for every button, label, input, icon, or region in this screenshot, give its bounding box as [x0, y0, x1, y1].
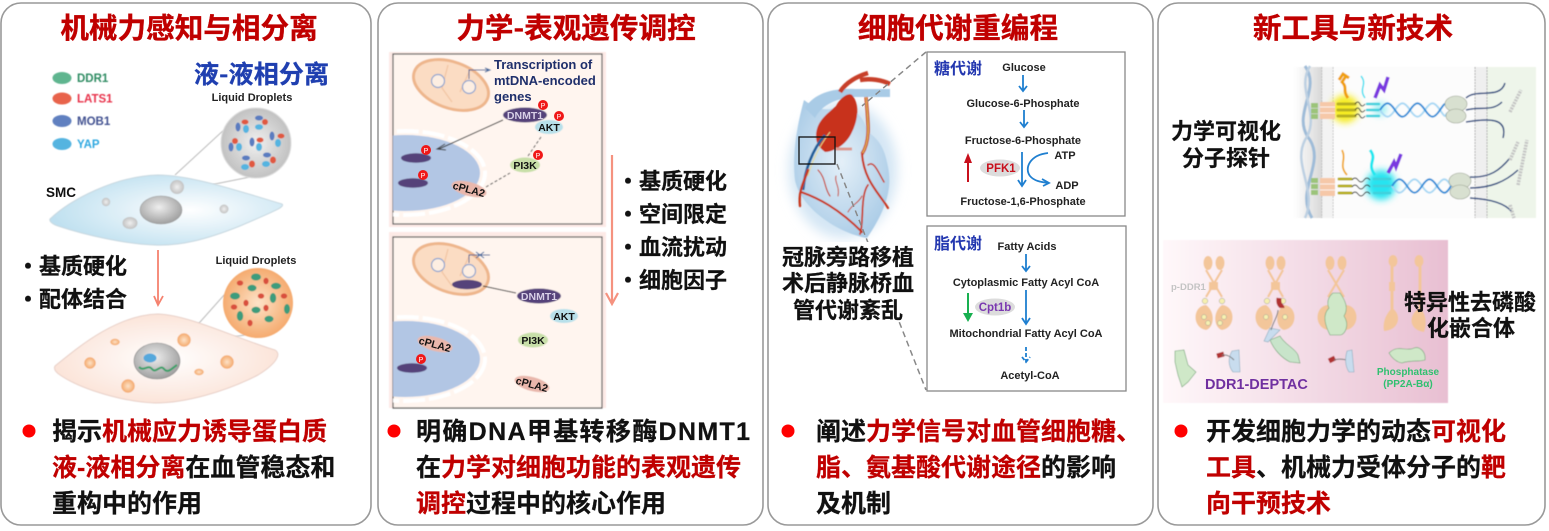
illustration: heart — [789, 73, 897, 238]
conclusion text panel 4: 工具、机械力受体分子的靶 — [1206, 454, 1506, 482]
panel: metabolic reprogramming — [768, 3, 1153, 525]
label: transcription: genes — [494, 89, 532, 104]
label: phosphatase: (PP2A-Bα) — [1383, 379, 1433, 390]
arrow: stimulus down — [606, 155, 618, 304]
box: lipid metabolism: Cytoplasmic Fatty Acyl CoA — [953, 277, 1099, 289]
conclusion text panel 2: 在力学对细胞功能的表观遗传 — [416, 454, 741, 482]
labels: signalling proteins active — [451, 110, 560, 200]
bullets: stimuli: • — [617, 263, 639, 295]
phospho markers active: P — [424, 148, 429, 155]
conclusion text panel 3: 阐述力学信号对血管细胞糖、 — [816, 418, 1141, 446]
title: panel 1: 机械力感知与相分离 — [60, 6, 318, 47]
bullets: stimuli: 基质硬化 — [639, 164, 727, 196]
label: liquid droplets upper: Liquid Droplets — [212, 92, 292, 104]
box: glucose metabolism: 糖代谢 — [934, 55, 982, 79]
conclusion text panel 1: 揭示机械应力诱导蛋白质 — [52, 417, 327, 446]
labels: signalling proteins inhibited: DNMT1 — [521, 291, 557, 303]
label: SMC: SMC — [46, 185, 76, 200]
illustration: tension probe — [1294, 66, 1536, 218]
conclusion text panel 2: 明确DNA甲基转移酶DNMT1 — [416, 418, 750, 446]
box: glucose metabolism — [927, 52, 1125, 216]
title: panel 3: 细胞代谢重编程 — [858, 6, 1058, 47]
label: transcription: Transcription of — [494, 57, 593, 72]
bullets: stimulus list: • — [17, 282, 39, 314]
box: glucose metabolism: Glucose-6-Phosphate — [966, 98, 1080, 110]
box: lipid metabolism — [927, 226, 1126, 391]
label: vein graft caption — [780, 240, 922, 325]
phospho markers active: P — [557, 114, 562, 121]
legend: proteins: LATS1 — [77, 94, 113, 106]
bullets: stimulus list: 配体结合 — [39, 282, 127, 314]
bullets: stimuli: 血流扰动 — [639, 230, 727, 262]
conclusion text panel 4: 开发细胞力学的动态可视化 — [1206, 418, 1506, 446]
illustration: DDR1-DEPTAC panel — [1163, 240, 1448, 403]
box: lipid metabolism: Mitochondrial Fatty Acyl CoA — [950, 328, 1103, 340]
bullets: stimulus list — [17, 249, 127, 314]
box: glucose metabolism: Fructose-1,6-Phosphate — [960, 196, 1086, 208]
arrow: transition down — [154, 250, 163, 305]
label: phosphatase — [1377, 367, 1440, 390]
labels: signalling proteins active: cPLA2 — [451, 180, 486, 200]
label: force probe: 分子探针 — [1182, 141, 1270, 173]
label: liquid droplets lower: Liquid Droplets — [216, 255, 296, 267]
box: glucose metabolism: ADP — [1055, 180, 1079, 192]
label: DDR1-DEPTAC: DDR1-DEPTAC — [1205, 377, 1308, 393]
bullets: stimulus list: 基质硬化 — [39, 249, 127, 281]
panel: new tools and technology — [1158, 3, 1545, 525]
labels: signalling proteins inhibited: cPLA2 — [514, 375, 549, 395]
label: transcription — [494, 57, 596, 104]
conclusion text panel 1: 液-液相分离在血管稳态和 — [52, 454, 335, 482]
bullets: stimuli — [617, 164, 727, 295]
label: transcription: mtDNA-encoded — [494, 73, 596, 88]
droplet zoom grey — [175, 108, 291, 191]
box: lipid metabolism: Fatty Acids — [998, 241, 1056, 253]
box: lipid metabolism: Acetyl-CoA — [1000, 370, 1060, 382]
conclusion text panel 4 — [1174, 418, 1506, 518]
bullets: stimuli: • — [617, 164, 639, 196]
box: glucose metabolism: Glucose — [1002, 62, 1046, 74]
conclusion text panel 2 — [388, 418, 750, 518]
conclusion text panel 1: 重构中的作用 — [52, 490, 202, 518]
title: panel 4: 新工具与新技术 — [1253, 6, 1453, 47]
bullets: stimulus list: • — [17, 249, 39, 281]
label: vein graft caption: 术后静脉桥血 — [782, 266, 914, 298]
dashed zoom lines — [837, 52, 926, 390]
labels: signalling proteins active: DNMT1 — [507, 110, 543, 122]
box: glucose metabolism: ATP — [1054, 150, 1076, 162]
box: glucose metabolism: Fructose-6-Phosphate — [965, 135, 1081, 147]
legend: proteins: DDR1 — [77, 73, 109, 85]
labels: signalling proteins inhibited — [416, 291, 575, 395]
label: specific dephosphorylation chimera: 化嵌合体 — [1427, 311, 1515, 343]
label: specific dephosphorylation chimera — [1404, 285, 1536, 343]
box: glucose metabolism: PFK1 — [986, 163, 1016, 175]
heading: liquid-liquid phase separation: 液-液相分离 — [194, 55, 329, 91]
bullets: stimuli: • — [617, 197, 639, 229]
phospho markers active: P — [541, 103, 546, 110]
labels: signalling proteins inhibited: PI3K — [521, 335, 545, 347]
labels: signalling proteins inhibited: cPLA2 — [417, 335, 452, 355]
label: force probe — [1171, 114, 1281, 173]
label: force probe: 力学可视化 — [1171, 114, 1281, 146]
label: phosphatase: Phosphatase — [1377, 367, 1440, 378]
panel: mechano-epigenetic regulation — [377, 2, 764, 526]
bullets: stimuli: 空间限定 — [639, 197, 727, 229]
conclusion text panel 1 — [22, 417, 335, 518]
cell: smooth muscle before — [50, 175, 283, 245]
label: p-DDR1: p-DDR1 — [1171, 282, 1207, 293]
title: panel 2: 力学-表观遗传调控 — [456, 6, 696, 47]
conclusion text panel 3: 及机制 — [816, 490, 891, 518]
conclusion text panel 3: 脂、氨基酸代谢途径的影响 — [816, 453, 1116, 482]
label: vein graft caption: 管代谢紊乱 — [793, 293, 903, 325]
labels: signalling proteins active: PI3K — [513, 160, 537, 172]
legend: proteins: MOB1 — [77, 116, 111, 128]
bullets: stimuli: • — [617, 230, 639, 262]
panel: mechanosensing and phase separation — [1, 3, 371, 525]
box: lipid metabolism: Cpt1b — [979, 302, 1011, 314]
labels: signalling proteins inhibited: AKT — [553, 311, 575, 323]
labels: signalling proteins inhibited: P — [419, 357, 424, 364]
label: vein graft caption: 冠脉旁路移植 — [782, 240, 914, 272]
legend: proteins: YAP — [77, 139, 100, 151]
legend: proteins — [52, 72, 113, 151]
diagram: inhibited state — [389, 232, 606, 410]
phospho markers active: P — [421, 173, 426, 180]
droplet zoom orange — [184, 268, 293, 344]
phospho markers active: P — [536, 153, 541, 160]
conclusion text panel 4: 向干预技术 — [1206, 490, 1331, 518]
bullets: stimuli: 细胞因子 — [639, 263, 727, 295]
box: lipid metabolism: 脂代谢 — [934, 230, 982, 254]
conclusion text panel 2: 调控过程中的核心作用 — [416, 490, 666, 518]
cell: smooth muscle after — [55, 314, 278, 403]
labels: signalling proteins active: AKT — [538, 122, 560, 134]
diagram: active state — [389, 52, 606, 227]
phospho markers active — [418, 100, 564, 180]
label: specific dephosphorylation chimera: 特异性去磷酸 — [1404, 285, 1536, 317]
conclusion text panel 3 — [782, 418, 1141, 518]
